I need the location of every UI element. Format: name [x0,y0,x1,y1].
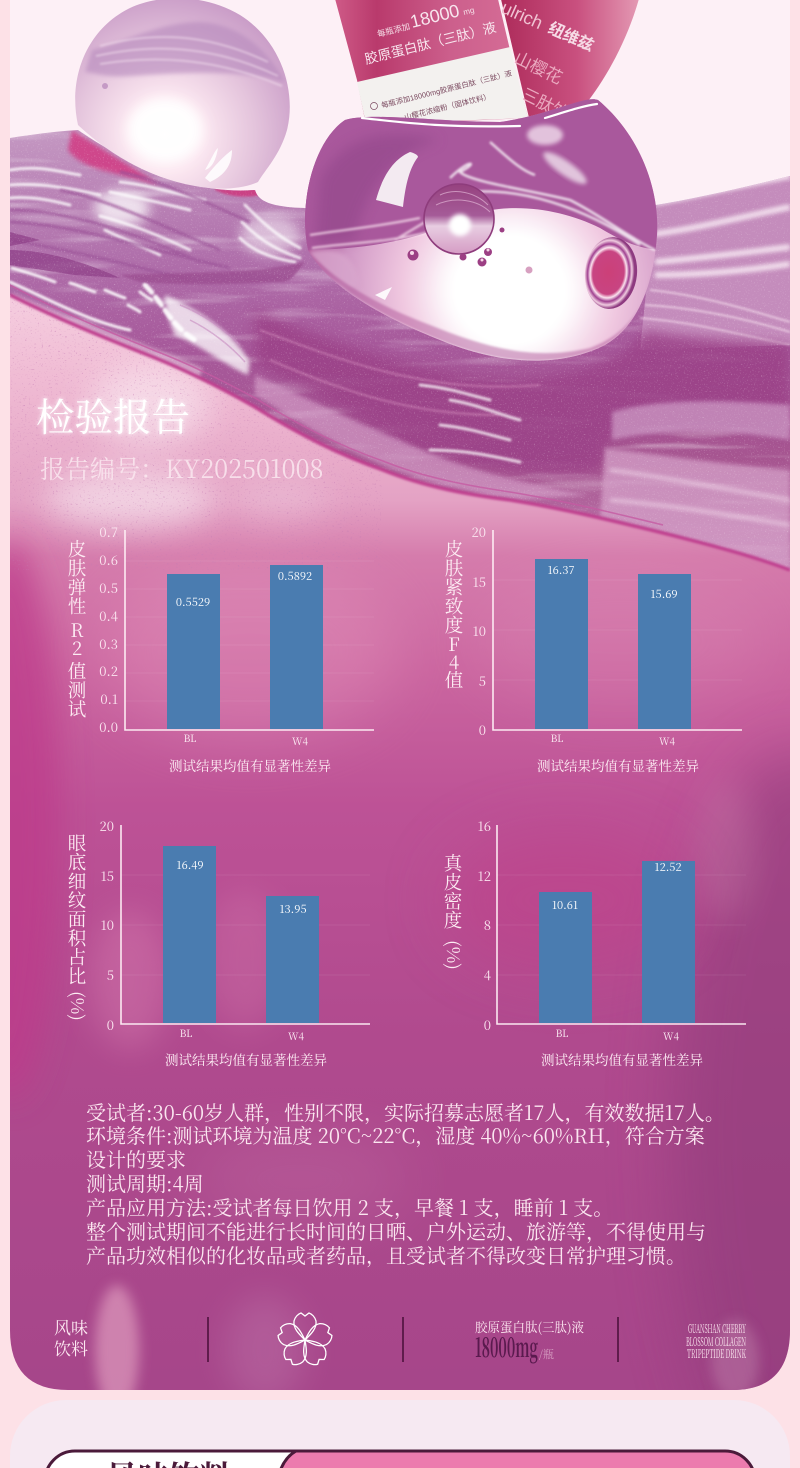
chart 1 y axis labels: 0.0 [99,717,118,736]
chart 1 categories [184,734,308,746]
chart 3 y axis labels [100,816,114,1034]
chart 4 grid [497,875,746,975]
text block: test conditions: 受试者:30-60岁人群，性别不限，实际招募志愿者17人，有效数据17人。 [86,1097,725,1126]
chart 4 bar values: 10.61 [552,897,578,913]
chart 1 y axis labels: 0.1 [100,689,118,708]
chart 1 vertical title: 皮 [68,536,86,562]
chart 2 vertical title: 值 [445,667,463,693]
chart 1 y axis labels: 0.5 [99,578,118,597]
chart 1 vertical title: 测 [68,677,86,703]
illustration: left sphere [75,0,290,189]
text block: test conditions: 整个测试期间不能进行长时间的日晒、户外运动、旅游等，不得使用与 [86,1216,706,1245]
chart 4 bar values: 12.52 [654,859,682,875]
front tube text [363,0,513,122]
chart 1 vertical title: 性 [68,593,87,619]
chart 2 vertical title: 皮 [445,536,463,562]
front tube text: 胶原蛋白肽（三肽）液 [363,19,498,67]
dosage unit: /瓶 [539,1346,554,1362]
chart 1 vertical title: 2 [72,635,82,661]
illustration: main sphere [296,90,664,361]
front tube text: 每瓶添加18000mg胶原蛋白肽（三肽）液 [380,69,513,110]
chart 3 y axis labels: 5 [107,965,114,984]
chart 1 vertical title: 值 [68,658,86,684]
dosage: 18000mg [475,1328,538,1365]
ring droplet [584,237,638,309]
chart 1 vertical title: 肤 [68,555,87,581]
chart 1 y axis labels: 0.6 [99,550,118,569]
chart 2 grid [493,580,742,680]
chart 1 categories: W4 [292,733,308,748]
footer label: flavoured drink: 饮料 [54,1335,88,1360]
chart 4 percent label: (%) [441,940,467,970]
white clouds behind title [45,365,330,530]
illustration: liquid surface [10,130,790,580]
chart 3 percent label: (%) [65,991,91,1021]
chart 4 vertical title: 度 [444,907,462,933]
right tube text: 三肽饮 [518,85,572,124]
chart 1 y axis labels: 0.4 [99,606,118,625]
small bubbles [408,228,532,274]
chart 2 vertical title: 肤 [445,555,464,581]
footer label: flavoured drink: 风味 [54,1314,88,1339]
chart 4 y axis labels: 0 [484,1015,491,1034]
chart 4 y axis labels [478,816,491,1034]
chart: skin firmness F4 [445,522,742,775]
title: 检验报告 [36,388,190,443]
chart 1 y axis labels [99,522,118,736]
chart 3 bar values: 16.49 [176,857,204,873]
inner bubble [424,184,494,254]
chart 4 vertical title: 密 [444,888,463,914]
right lower pale zones [612,401,790,440]
chart 4 bar values [552,859,682,913]
center-left white patch [165,295,250,375]
panel: lower card [10,1400,790,1468]
chart 4 categories: BL [556,1025,568,1040]
chart 1 grid [125,561,374,701]
chart 2 categories: W4 [659,733,675,748]
chart 2 y axis labels: 10 [473,621,486,640]
chart 1 bar values [176,572,312,606]
right tube text [502,4,595,112]
text block: test conditions: 环境条件:测试环境为温度 20°C~22°C，湿度 40%~60%RH，符合方案 [86,1120,705,1149]
chart 1 vertical title: 弹 [68,574,86,600]
chart 2 vertical title: 致 [445,593,463,619]
text block: test conditions: 产品功效相似的化妆品或者药品，且受试者不得改变日常护理习惯。 [86,1240,686,1269]
chart 2 y axis labels: 15 [473,572,486,591]
chart 3 vertical title: 眼 [68,830,87,856]
illustration: right tube [498,0,640,124]
chart 1 bar values: 0.5529 [176,594,210,610]
chart 4 axes [497,825,746,1024]
front tube text: mg [462,6,475,17]
chart 4 bars [539,861,695,1023]
chart 4 categories: W4 [663,1028,679,1043]
chart 2 bar values: 16.37 [547,562,575,578]
chart 1 axes [125,530,374,730]
chart 2 categories [551,734,675,746]
chart 2 y axis labels: 0 [479,720,486,739]
chart: under-eye wrinkle area [65,816,370,1069]
chart 2 axes [493,530,742,730]
chart 3 y axis labels: 15 [101,866,114,885]
chart 3 vertical title: 占 [68,944,86,970]
text block: test conditions: 产品应用方法:受试者每日饮用 2 支，早餐 1 支，睡前 1 支。 [86,1192,613,1221]
chart 2 y axis labels: 5 [479,671,486,690]
chart 2 vertical title: 紧 [445,574,463,600]
chart 2 categories: BL [551,730,563,745]
left: wave ridge [120,262,305,284]
chart 3 categories: BL [180,1025,192,1040]
front tube text: 每瓶添加 [376,21,411,39]
product name: 胶原蛋白肽(三肽)液 [475,1317,584,1336]
icon: cherry blossom [276,1313,334,1368]
chart 3 y axis labels: 0 [107,1015,114,1034]
chart 4 y axis labels: 16 [478,816,491,835]
chart 3 categories [180,1025,304,1043]
dividers [208,1317,618,1362]
chart 3 vertical title: 细 [68,868,86,894]
chart 2 bar values [548,566,677,598]
chart 2 caption: 测试结果均值有显著性差异 [537,755,699,775]
chart 4 vertical title: 皮 [444,869,462,895]
chart: skin elasticity R2 [68,522,374,775]
text block: test conditions: 测试周期:4周 [86,1168,204,1197]
chart 3 bar values [176,857,307,917]
left: bright fan [94,190,150,226]
chart 1 y axis labels: 0.2 [99,661,118,680]
chart 2 y axis labels: 20 [472,522,486,541]
chart 4 vertical title: 真 [444,850,464,876]
chart 1 y axis labels: 0.3 [99,634,118,653]
chart 1 y axis labels: 0.7 [99,522,118,541]
chart 3 axes [121,825,370,1024]
right: pale ripples [640,176,790,350]
chart 3 y axis labels: 10 [101,915,114,934]
chart 3 y axis labels: 20 [100,816,114,835]
chart 3 caption: 测试结果均值有显著性差异 [165,1049,327,1069]
chart 2 vertical title: 度 [445,612,463,638]
chart 2 y axis labels [472,528,486,735]
front tube text: 山樱花浓缩粉（固体饮料） [403,92,492,122]
chart 1 vertical title: R [70,617,84,643]
liquid sheet edge [10,295,790,570]
chart 3 vertical title: 比 [68,963,86,989]
chart 1 caption: 测试结果均值有显著性差异 [169,755,331,775]
illustration: front tube [334,0,528,125]
chart 4 caption: 测试结果均值有显著性差异 [541,1049,703,1069]
chart 3 vertical title: 积 [68,925,87,951]
text block: test conditions: 设计的要求 [86,1144,186,1173]
chart 3 vertical title: 底 [68,849,86,875]
chart 2 vertical title: F [448,631,460,657]
pill heading [45,1451,755,1468]
chart: dermal density [441,816,746,1069]
chart 3 vertical title: 面 [68,906,86,932]
chart 1 categories: BL [184,730,196,745]
chart 2 bar values: 15.69 [650,586,678,602]
purple pool [255,310,790,474]
front tube text: 18000 [408,0,461,32]
report number: 报告编号：KY202501008 [40,450,323,486]
chart 4 y axis labels: 12 [478,866,491,885]
chart 3 bars [163,846,319,1023]
chart 3 bar values: 13.95 [279,901,307,917]
chart 1 bar values: 0.5892 [278,568,312,584]
chart 3 grid [121,875,370,975]
chart 3 vertical title: 纹 [68,887,86,913]
chart 2 vertical title: 4 [449,649,459,675]
chart 4 categories [556,1025,679,1043]
chart 4 y axis labels: 8 [484,915,491,934]
chart 2 bars [535,559,691,729]
chart 3 categories: W4 [288,1028,304,1043]
mid pale stripes [255,375,590,500]
chart 1 vertical title: 试 [68,696,86,722]
footer: product strip [54,1313,746,1368]
right tube text: 纽维兹 [545,18,597,55]
left: crimson root of sphere [68,130,160,185]
chart 4 y axis labels: 4 [484,965,491,984]
right tube text: 山樱花 [511,49,565,88]
chart 1 bars [167,565,323,729]
